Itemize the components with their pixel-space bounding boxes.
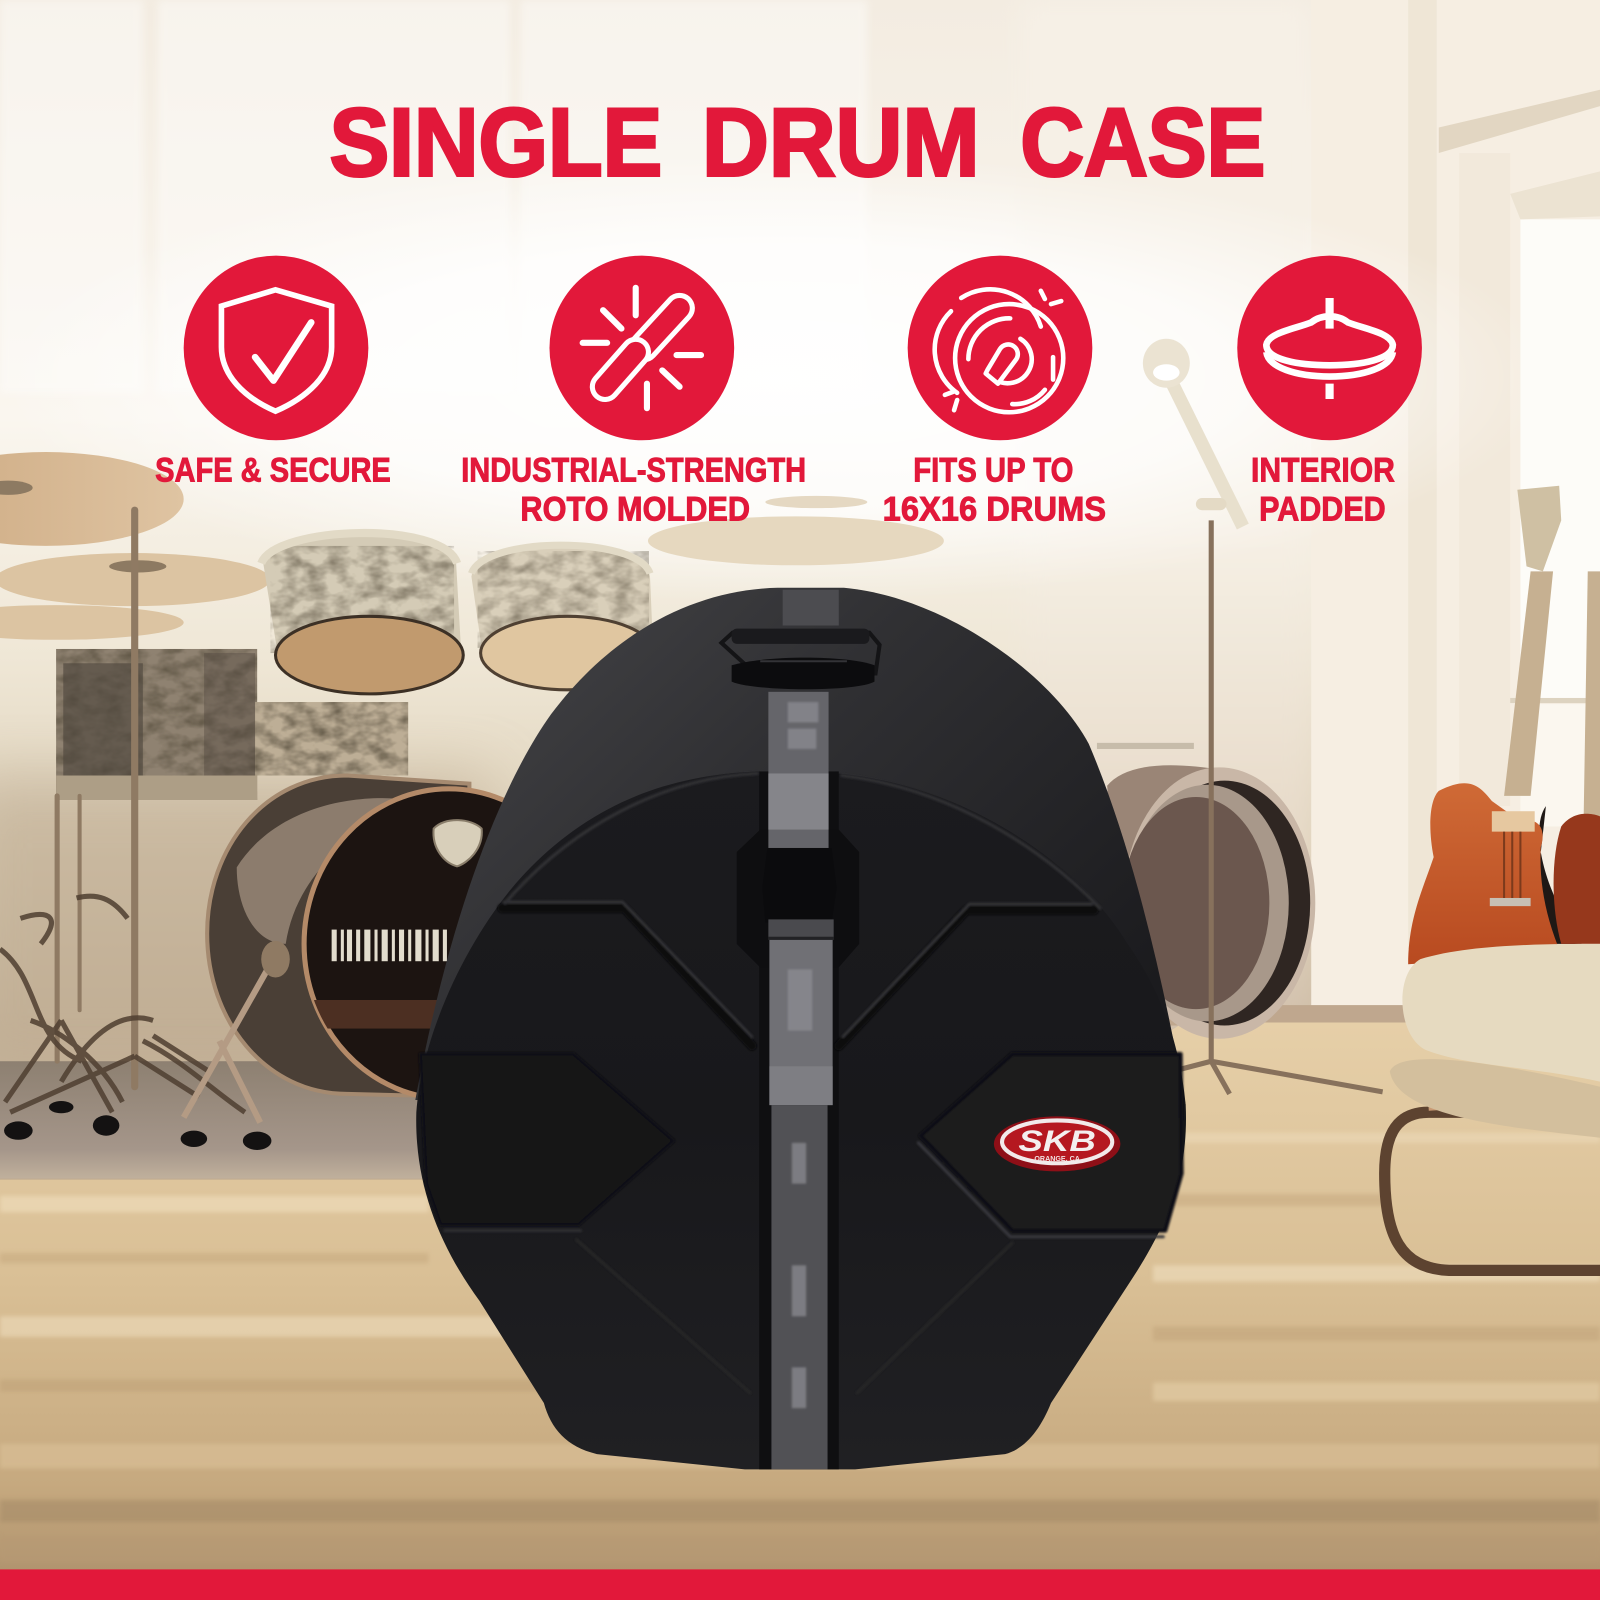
label: interior padded	[1251, 452, 1395, 528]
SKB logo badge	[994, 1116, 1120, 1171]
drum case product	[415, 588, 1186, 1469]
icon: cymbals	[908, 256, 1092, 440]
bass drum logo badge	[433, 820, 482, 866]
left side panel	[420, 1054, 673, 1231]
tom two	[471, 544, 654, 690]
label: industrial strength roto molded	[461, 452, 806, 528]
feature: industrial strength	[461, 256, 806, 528]
rug	[0, 1061, 480, 1179]
floor tom behind	[255, 702, 408, 776]
window and curtain area	[1311, 0, 1600, 1031]
tom one	[261, 533, 463, 694]
bass drum	[181, 774, 504, 1124]
bottom red bar	[0, 1569, 1600, 1600]
cymbals	[0, 452, 944, 640]
stands	[57, 510, 135, 1087]
label: industrial strength roto molded: INDUSTRIAL-STRENGTH	[461, 452, 806, 490]
title: SINGLE	[330, 88, 662, 197]
sofa	[1385, 944, 1600, 1270]
SKB logo badge: ORANGE, CA	[1034, 1155, 1080, 1163]
SKB logo badge: SKB	[1018, 1125, 1096, 1158]
buckle recess	[737, 830, 859, 967]
case back body	[415, 588, 1186, 1105]
title	[330, 88, 1265, 197]
label: fits up to 16x16 drums: FITS UP TO	[913, 452, 1073, 490]
left upper panel edge	[502, 902, 752, 1046]
rim highlight	[505, 773, 1100, 908]
strap logos	[788, 702, 818, 1408]
label: fits up to 16x16 drums	[883, 452, 1106, 528]
stand hardware tangle	[0, 896, 245, 1112]
right upper panel edge	[839, 904, 1094, 1046]
feature: interior padded	[1237, 256, 1422, 528]
wall panels	[0, 0, 867, 393]
centre seam	[759, 771, 839, 1469]
feature: fits up to 16x16 drums	[883, 256, 1106, 528]
bass drum lettering stripes	[332, 930, 447, 961]
baseboard	[1112, 1005, 1600, 1026]
left lower edge	[577, 1240, 750, 1393]
label: interior padded: PADDED	[1259, 490, 1386, 528]
left wall shadow near drums	[0, 776, 490, 1082]
wall	[0, 0, 1600, 1194]
top handle	[721, 629, 880, 689]
title: DRUM	[702, 88, 980, 197]
label: industrial strength roto molded: ROTO MOLDED	[520, 490, 750, 528]
guitars	[1408, 486, 1600, 964]
raised panel edges	[420, 773, 1182, 1393]
label: safe and secure: SAFE & SECURE	[155, 452, 391, 490]
label: interior padded: INTERIOR	[1251, 452, 1395, 490]
rack tom left	[56, 649, 257, 800]
strap	[768, 590, 839, 1469]
floor	[0, 1022, 1600, 1600]
buckle	[762, 848, 837, 940]
hardware feet	[4, 1101, 271, 1150]
top white glow	[0, 153, 1551, 602]
right side panel	[918, 1054, 1182, 1237]
icon: hi-hat	[1237, 256, 1422, 440]
right lower edge	[857, 1243, 1012, 1393]
title: CASE	[1020, 88, 1265, 197]
label: fits up to 16x16 drums: 16X16 DRUMS	[883, 490, 1106, 528]
microphone stand	[1133, 339, 1383, 1094]
floor planks	[0, 1133, 1600, 1562]
icon: shield	[184, 256, 368, 440]
drum kit	[0, 452, 944, 1150]
icon: breaking chain link	[549, 256, 734, 440]
right wall	[1020, 0, 1311, 1061]
feature: safe and secure	[155, 256, 391, 490]
case front face	[416, 771, 1186, 1469]
right bass drum	[1097, 743, 1315, 1039]
